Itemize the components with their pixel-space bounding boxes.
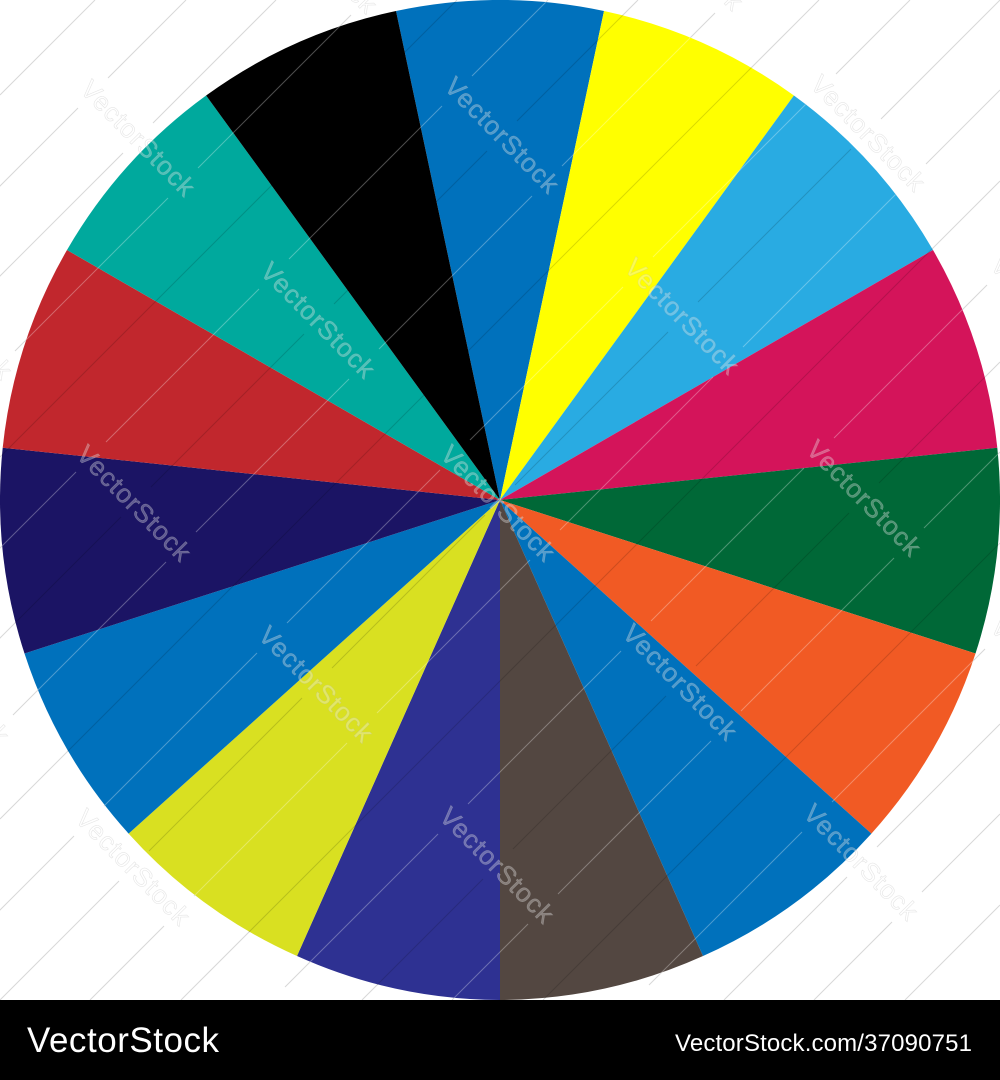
watermark text grid: VectorStock	[253, 620, 380, 749]
wedge: light blue	[500, 96, 933, 500]
wedge: navy	[0, 448, 500, 654]
wedge: orange	[500, 500, 976, 834]
watermark text grid: VectorStock	[75, 74, 202, 203]
watermark text grid: VectorStock	[617, 618, 744, 747]
wedge: dark green	[500, 448, 1000, 654]
watermark text grid: VectorStock	[801, 434, 928, 563]
wedge: blue lower left	[24, 500, 500, 834]
wedge: magenta	[500, 250, 997, 500]
watermark text grid: VectorStock	[805, 69, 932, 198]
watermark text grid: VectorStock	[439, 71, 566, 200]
wedge: black	[206, 11, 500, 500]
wedge: yellow green	[129, 500, 500, 956]
footer bar	[0, 1000, 1000, 1080]
watermark text grid: VectorStock	[434, 801, 561, 930]
wedge: yellow	[500, 11, 794, 500]
watermark text grid: VectorStock	[71, 439, 198, 568]
watermark text grid: VectorStock	[255, 256, 382, 385]
wedge: red	[3, 250, 500, 500]
watermark text grid: VectorStock	[435, 439, 562, 568]
wedge: blue lower right	[500, 500, 871, 956]
wedge: brown	[500, 500, 703, 1000]
watermark text grid: VectorStock	[798, 798, 925, 927]
watermark text grid: VectorStock	[619, 252, 746, 381]
watermark text grid: VectorStock	[70, 803, 197, 932]
wedge: blue top	[396, 0, 604, 500]
wedge: indigo	[297, 500, 500, 1000]
footer brand name: VectorStock	[27, 1021, 220, 1060]
wedge: teal	[67, 96, 500, 500]
footer image URL: VectorStock.com/37090751	[675, 1030, 972, 1057]
